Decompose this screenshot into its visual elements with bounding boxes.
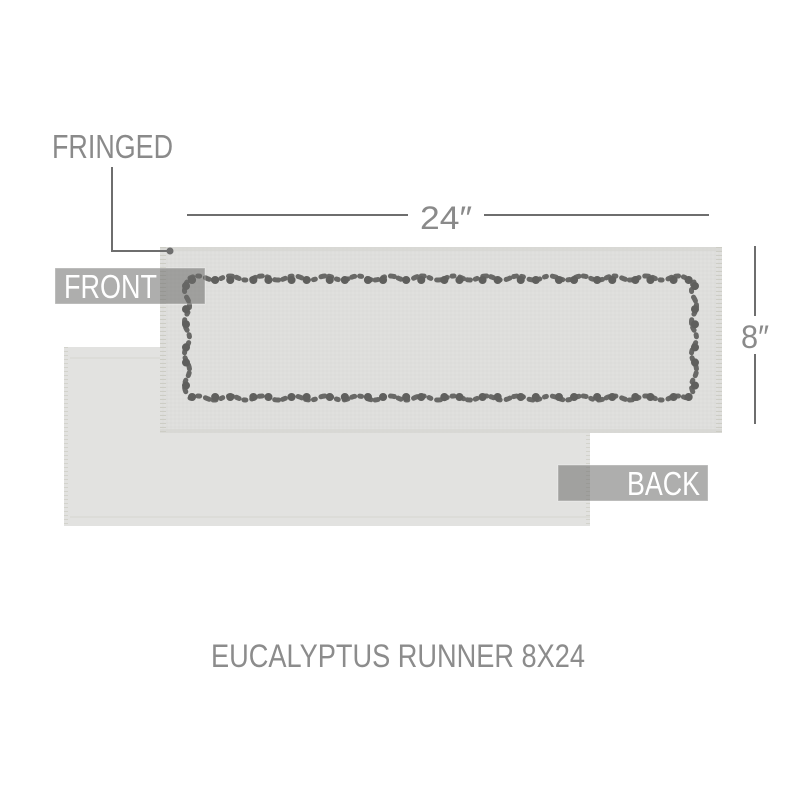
back runner <box>64 347 590 526</box>
height dimension: 8 inches: 8″ <box>741 319 769 355</box>
fringed leader line <box>112 167 174 254</box>
product title: EUCALYPTUS RUNNER 8X24 <box>211 638 585 674</box>
back label <box>558 465 708 502</box>
width dimension: 24 inches: 24″ <box>420 200 472 236</box>
front runner <box>160 247 722 433</box>
front label: FRONT <box>64 268 157 305</box>
back label: BACK <box>627 465 700 502</box>
eucalyptus garland border <box>184 276 696 400</box>
fringed label: FRINGED <box>52 128 173 165</box>
